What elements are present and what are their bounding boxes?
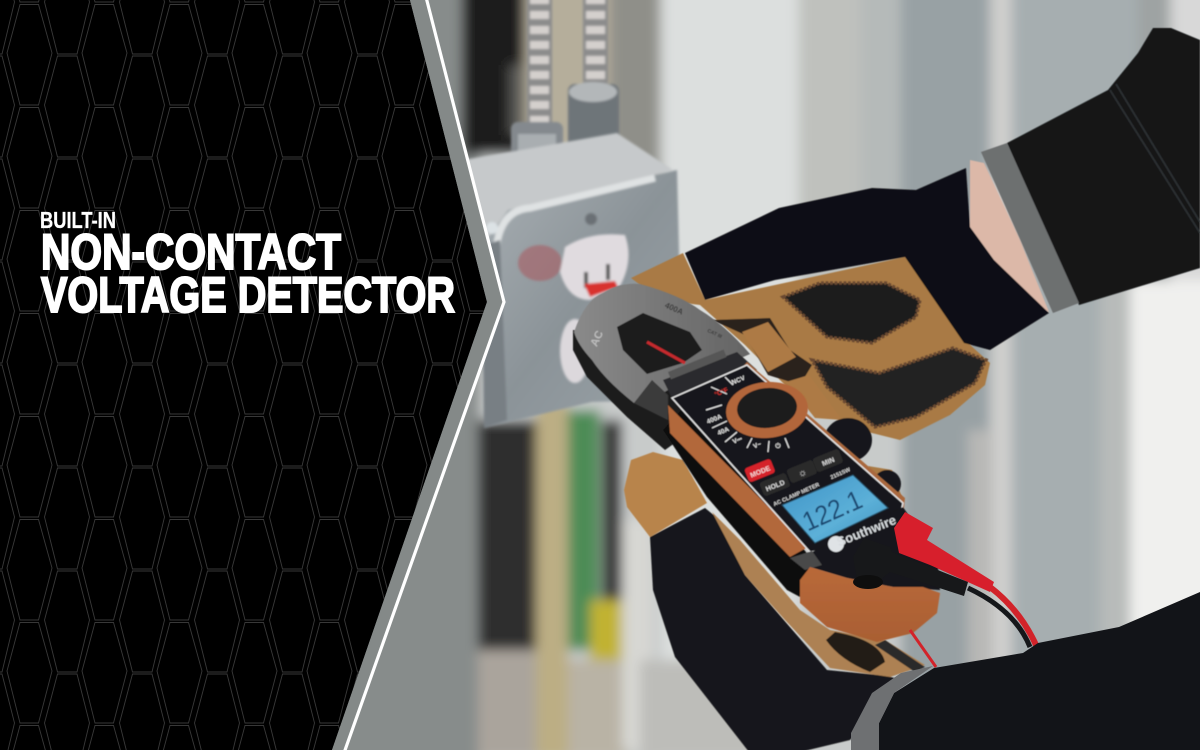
black plug xyxy=(853,538,968,596)
red wire through clamp xyxy=(647,342,685,363)
button: HOLD: HOLD xyxy=(765,479,786,493)
grey strip beside panel xyxy=(332,0,504,750)
dark finger straps xyxy=(712,318,812,385)
white chevron line xyxy=(344,0,504,750)
conduit: right xyxy=(568,0,619,160)
blurred photo background xyxy=(300,0,1200,750)
heading line: BUILT-IN: BUILT-IN xyxy=(40,207,116,233)
button: MODE xyxy=(744,458,776,483)
label: AC: AC xyxy=(588,329,606,348)
heading line: NON-CONTACT: NON-CONTACT xyxy=(41,224,341,280)
clamp meter xyxy=(573,284,940,642)
button: MODE: MODE xyxy=(750,465,772,480)
grey cuff: upper xyxy=(981,143,1079,313)
button: HOLD xyxy=(759,472,791,497)
bare wrist xyxy=(970,160,1049,312)
black corner xyxy=(793,507,940,590)
label: CAT III: CAT III xyxy=(706,328,723,340)
brand: Southwire: Southwire xyxy=(834,512,898,550)
brown palm leather xyxy=(631,253,990,440)
clamp opening xyxy=(617,313,702,374)
meter black face xyxy=(672,365,903,552)
padded knuckle: lower xyxy=(812,348,986,427)
brown bottom bumper xyxy=(800,567,940,642)
clamp head wedge xyxy=(634,380,668,420)
label: model: 2151SW xyxy=(830,467,852,481)
meter head top xyxy=(663,352,757,398)
red plug xyxy=(894,512,994,592)
red wire: rear xyxy=(910,630,936,667)
brown finger strip xyxy=(712,512,925,677)
left black hexagon panel xyxy=(0,0,487,750)
button: backlight: ☼ xyxy=(796,467,809,480)
gloved hand: upper (holding tester) xyxy=(631,28,1200,500)
clamp jaw black shell xyxy=(573,330,705,450)
dial knob xyxy=(735,385,799,431)
jaw labels xyxy=(588,301,723,348)
label: V ac: V~ xyxy=(752,441,763,450)
label: temp: °C°F xyxy=(713,386,729,398)
gloved hand: lower (holding tester) xyxy=(624,452,925,750)
conduit: left xyxy=(511,0,563,170)
label: power: ⏻ xyxy=(775,442,781,450)
sleeve: upper xyxy=(1007,28,1200,305)
padded knuckle: upper xyxy=(783,283,920,343)
label: V dc: V⎓ xyxy=(732,435,744,446)
label: 400A: 400A xyxy=(706,413,723,426)
brown left strip xyxy=(668,405,808,557)
label: AC clamp meter: AC CLAMP METER xyxy=(773,482,821,508)
heading line: VOLTAGE DETECTOR: VOLTAGE DETECTOR xyxy=(41,267,455,323)
brown thumb xyxy=(624,452,707,537)
dial labels xyxy=(706,375,781,450)
label: 400A: 400A xyxy=(663,301,685,317)
dial ticks xyxy=(706,377,789,452)
black sleeve xyxy=(879,592,1200,750)
dial ring xyxy=(724,379,810,441)
heading xyxy=(40,207,455,323)
forearm sleeve: lower xyxy=(851,592,1200,750)
dark stitched patch xyxy=(826,632,885,672)
hexagon pattern xyxy=(0,0,487,750)
box body xyxy=(464,133,680,428)
junction box with conduits xyxy=(464,0,680,428)
brown right strip xyxy=(742,362,905,508)
sleeve seam xyxy=(1110,84,1200,233)
black glove back xyxy=(685,168,1049,350)
grey cuff: lower xyxy=(851,666,933,750)
label: 40A: 40A xyxy=(717,426,731,437)
test leads xyxy=(853,512,1036,667)
outlet xyxy=(518,234,629,383)
meter dark side xyxy=(663,400,812,597)
LCD display xyxy=(782,475,888,543)
button: backlight xyxy=(786,459,818,484)
red wire: front xyxy=(990,587,1036,645)
lower glove black xyxy=(650,508,900,750)
reading: 122.1 xyxy=(798,484,867,537)
fingertips behind meter xyxy=(824,418,872,462)
button: MIN xyxy=(812,448,844,473)
clamp jaw grey xyxy=(574,284,750,403)
button: MIN: MIN xyxy=(821,457,836,468)
black wire xyxy=(968,588,1030,647)
label: NCV: NCV xyxy=(731,375,747,386)
